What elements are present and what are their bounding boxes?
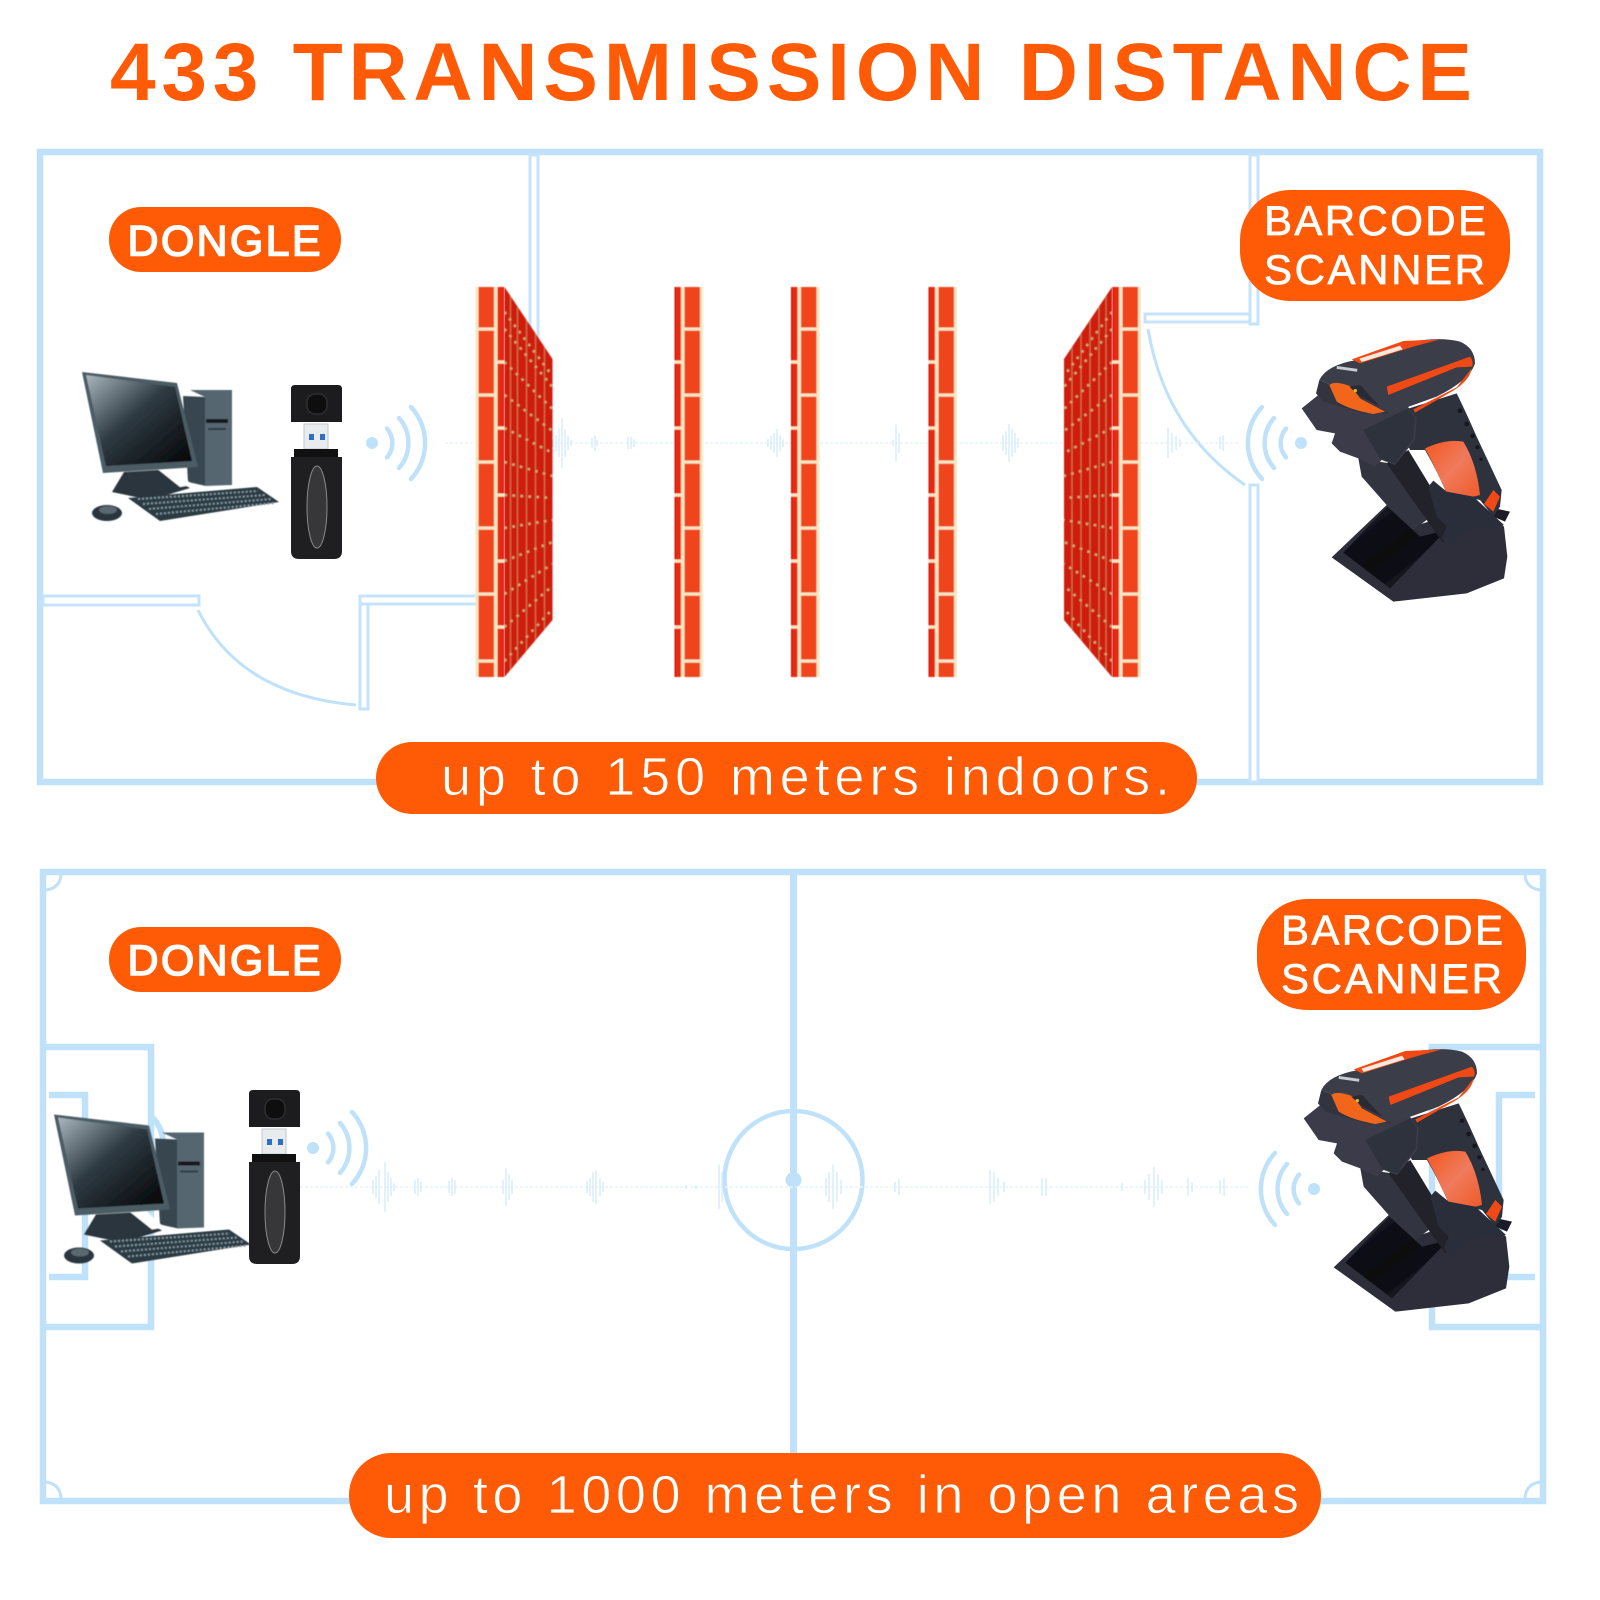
brick wall: narrow 1 — [674, 287, 703, 677]
icon: desktop computer — [54, 1114, 251, 1264]
label: barcode scanner: BARCODE — [1264, 197, 1486, 244]
label: barcode scanner — [1257, 899, 1526, 1010]
brick wall: narrow 3 — [928, 287, 957, 677]
icon: desktop computer — [82, 372, 279, 521]
label: dongle: DONGLE — [128, 937, 320, 985]
label: dongle: DONGLE — [128, 218, 320, 266]
icon: dongle signal — [366, 407, 425, 479]
icon: USB dongle — [291, 385, 342, 559]
label: barcode scanner: SCANNER — [1281, 955, 1502, 1002]
brick wall: right angled — [1064, 287, 1141, 677]
panel: open area football pitch — [43, 872, 1543, 1538]
panel: indoors floor plan — [40, 152, 1540, 814]
icon: USB dongle — [249, 1090, 300, 1264]
signal waveform — [445, 418, 1240, 468]
callout: open area range — [349, 1453, 1321, 1538]
icon: barcode scanner on cradle — [1302, 339, 1510, 602]
label: barcode scanner — [1240, 190, 1510, 301]
floor plan walls — [40, 152, 1540, 782]
label: dongle — [109, 207, 341, 272]
label: dongle — [109, 927, 341, 992]
pitch lines — [43, 872, 1543, 1501]
brick wall: left angled — [476, 287, 552, 677]
label: barcode scanner: SCANNER — [1264, 246, 1485, 293]
callout: open area range: up to 1000 meters in open areas — [384, 1465, 1299, 1525]
callout: indoor range: up to 150 meters indoors. — [441, 747, 1170, 807]
brick wall: narrow 2 — [791, 287, 820, 677]
icon: barcode scanner on cradle — [1304, 1049, 1512, 1312]
signal waveform — [300, 1162, 1250, 1212]
icon: dongle signal — [307, 1112, 366, 1184]
label: barcode scanner: BARCODE — [1281, 906, 1503, 954]
icon: scanner signal — [1248, 407, 1307, 479]
title: 433 TRANSMISSION DISTANCE — [110, 27, 1472, 118]
icon: scanner signal — [1261, 1153, 1320, 1225]
